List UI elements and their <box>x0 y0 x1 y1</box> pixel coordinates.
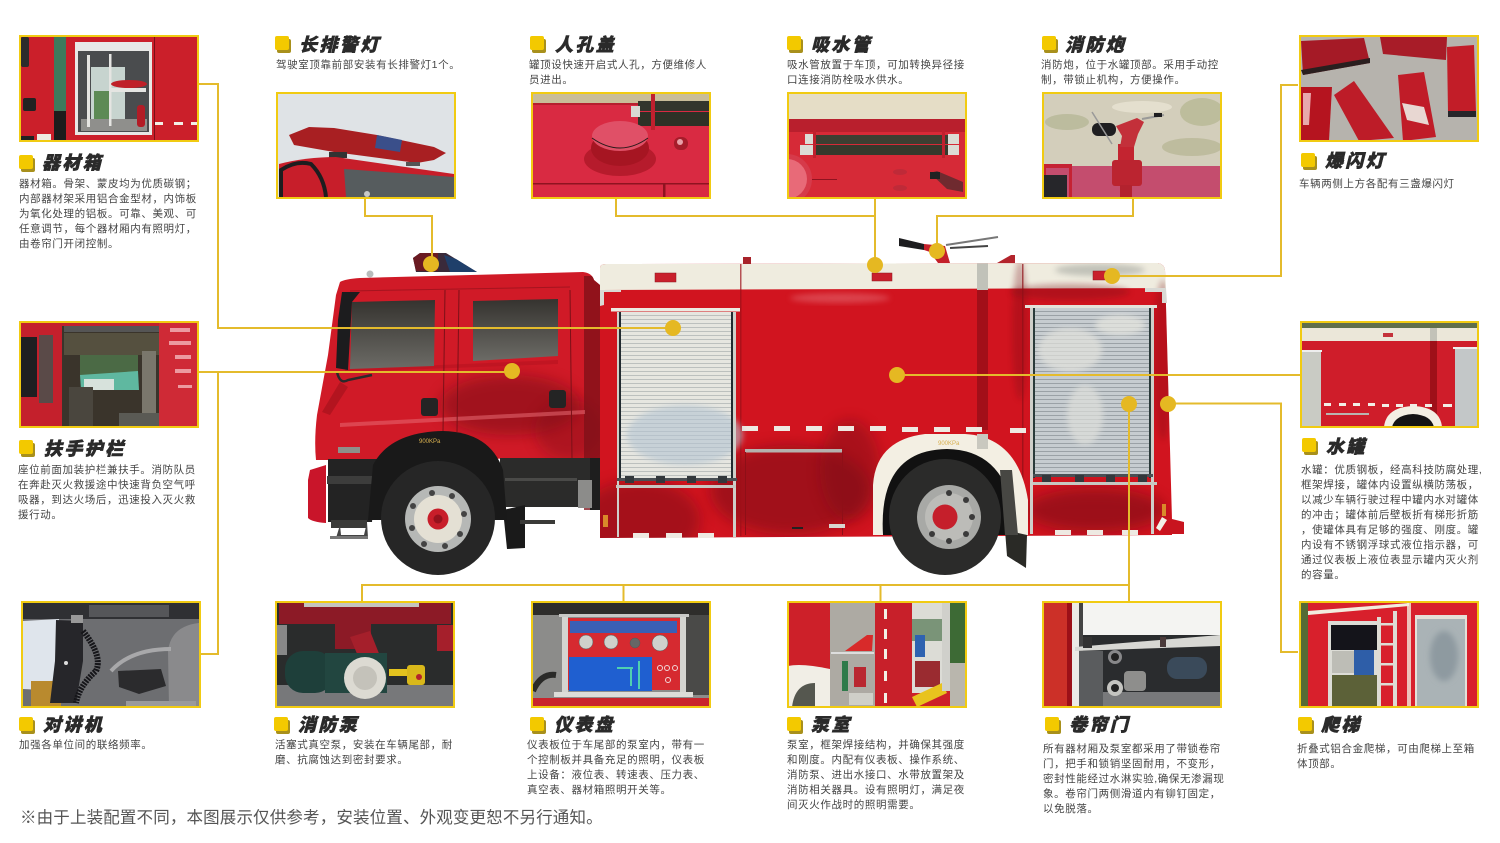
text: pump: 磨、抗腐蚀达到密封要求。 <box>275 754 408 766</box>
text: ladder <box>1297 743 1475 770</box>
icon: bullet water cannon <box>1042 36 1056 50</box>
text: handrail: 座位前面加装护栏兼扶手。消防队员 <box>18 464 196 476</box>
text: intercom: 加强各单位间的联络频率。 <box>19 739 152 751</box>
text: instrument panel: 仪表板位于车尾部的泵室内，带有一 <box>527 739 705 751</box>
photo: instrument panel <box>531 601 711 708</box>
text: water tank: 内设有不锈钢浮球式液位指示器，可 <box>1301 539 1479 551</box>
icon: bullet light bar <box>275 36 289 50</box>
text: water cannon <box>1041 59 1219 86</box>
icon: bullet equipment box <box>19 155 33 169</box>
photo: pump room <box>787 601 967 708</box>
text: strobe: 车辆两侧上方各配有三盏爆闪灯 <box>1299 178 1455 190</box>
text: water tank: 的容量。 <box>1301 569 1345 581</box>
text: handrail: 援行动。 <box>18 509 62 521</box>
tyre pressure labels: 900KPa <box>419 439 441 445</box>
photo: ladder <box>1299 601 1479 708</box>
text: light bar: 驾驶室顶靠前部安装有长排警灯1个。 <box>276 59 460 71</box>
photo: roller door <box>1042 601 1222 708</box>
icon: bullet strobe <box>1301 153 1315 167</box>
text: roller door <box>1043 743 1224 815</box>
text: roller door: 密封性能经过水淋实验,确保无渗漏现 <box>1043 773 1224 785</box>
text: instrument panel: 个控制板并具备充足的照明，仪表板 <box>527 754 705 766</box>
icon: bullet intercom <box>19 717 33 731</box>
text: handrail <box>18 464 196 521</box>
icon: bullet pump <box>274 717 288 731</box>
text: pump room: 间灭火作战时的照明需要。 <box>787 799 920 811</box>
text: ladder: 折叠式铝合金爬梯，可由爬梯上至箱 <box>1297 743 1475 755</box>
photo: equipment box <box>19 35 199 142</box>
photo: light bar <box>276 92 456 199</box>
connector: handrail <box>199 371 512 373</box>
cab <box>315 272 605 516</box>
text: pump room: 消防相关器具。设有照明灯，满足夜 <box>787 784 965 796</box>
cab roof light bar <box>366 253 477 278</box>
footer note: ※由于上装配置不同，本图展示仅供参考，安装位置、外观变更恕不另行通知。 <box>20 809 603 827</box>
front wheel <box>381 461 495 575</box>
connector: strobe <box>1112 85 1298 276</box>
text: water tank: 的冲击；罐体前后壁板折有梯形折筋 <box>1301 509 1479 521</box>
connector: bottom bus <box>362 404 1129 601</box>
text: pump room <box>787 739 965 811</box>
heading: pump room: 泵室 <box>811 715 852 735</box>
connector: light bar <box>365 199 432 264</box>
icon: bullet water tank <box>1302 438 1316 452</box>
heading: manhole: 人孔盖 <box>555 35 616 55</box>
heading: roller door: 卷帘门 <box>1069 715 1130 735</box>
text: suction hose: 口连接消防栓吸水供水。 <box>787 74 909 86</box>
strobe lights on body <box>655 271 1113 282</box>
text: equipment box: 由卷帘门开闭控制。 <box>19 238 119 250</box>
photo: manhole <box>531 92 711 199</box>
icon: bullet handrail <box>19 440 33 454</box>
photo: suction hose <box>787 92 967 199</box>
icon: bullet pump room <box>787 717 801 731</box>
photo: handrail <box>19 321 199 428</box>
text: pump room: 和刚度。内配有仪表板、操作系统、 <box>787 754 965 766</box>
heading: pump: 消防泵 <box>298 715 359 735</box>
cab windows <box>350 299 558 369</box>
text: ladder: 体顶部。 <box>1297 758 1341 770</box>
heading: suction hose: 吸水管 <box>811 35 872 55</box>
text: pump <box>275 739 453 766</box>
text: suction hose: 吸水管放置于车顶，可加转换异径接 <box>787 59 965 71</box>
icon: bullet ladder <box>1298 717 1312 731</box>
chassis side <box>500 458 600 549</box>
rear fender <box>873 434 1028 568</box>
rear roller shutter <box>1025 305 1184 534</box>
rear wheel <box>889 459 1001 575</box>
text: instrument panel: 上设备：液位表、转速表、压力表、 <box>527 769 705 781</box>
text: manhole: 员进出。 <box>529 74 573 86</box>
heading: equipment box: 器材箱 <box>42 153 103 173</box>
text: water tank: 以减少车辆行驶过程中罐内水对罐体 <box>1301 494 1479 506</box>
connector: ladder <box>1168 404 1298 652</box>
door handles <box>421 390 566 416</box>
fire truck illustration <box>308 236 1184 575</box>
connector: intercom <box>201 372 218 654</box>
heading: instrument panel: 仪表盘 <box>554 715 615 735</box>
photo: water tank <box>1300 321 1479 428</box>
text: water tank <box>1301 464 1482 581</box>
front wheel arch <box>368 431 507 520</box>
front roller shutter <box>603 308 743 537</box>
roof water cannon <box>743 237 1015 264</box>
heading: water tank: 水罐 <box>1326 437 1367 457</box>
text: pump room: 泵室，框架焊接结构，并确保其强度 <box>787 739 965 751</box>
icon: bullet manhole <box>530 36 544 50</box>
heading: ladder: 爬梯 <box>1321 715 1362 735</box>
connector: suction hose <box>874 199 876 265</box>
text: water tank: 通过仪表板上液位表显示罐内灭火剂 <box>1301 554 1479 566</box>
connector: equipment box <box>199 84 673 328</box>
text: roller door: 所有器材厢及泵室都采用了带锁卷帘 <box>1043 743 1221 755</box>
text: equipment box: 为氧化处理的铝板。可靠、美观、可 <box>19 208 197 220</box>
text: suction hose <box>787 59 965 86</box>
text: equipment box: 内部器材架采用铝合金型材，内饰板 <box>19 193 197 205</box>
connector: water cannon <box>937 199 1133 251</box>
photo: pump <box>275 601 455 708</box>
text: equipment box <box>19 178 197 250</box>
text: roller door: 门，把手和锁销坚固耐用，不变形， <box>1043 758 1221 770</box>
text: instrument panel: 真空表、器材箱照明开关等。 <box>527 784 672 796</box>
heading: light bar: 长排警灯 <box>299 35 381 55</box>
connector: pump room drops <box>624 585 1129 601</box>
heading: intercom: 对讲机 <box>43 715 104 735</box>
icon: bullet suction hose <box>787 36 801 50</box>
text: pump room: 消防泵、进出水接口、水带放置架及 <box>787 769 965 781</box>
callout dots <box>423 243 1176 412</box>
text: roller door: 以免脱落。 <box>1043 803 1099 815</box>
text: water tank: 水罐：优质钢板，经高科技防腐处理, <box>1301 464 1482 476</box>
photo: strobe lights <box>1299 35 1479 142</box>
heading: water cannon: 消防炮 <box>1065 35 1126 55</box>
box body <box>600 263 1172 538</box>
heading: handrail: 扶手护栏 <box>44 439 126 459</box>
text: equipment box: 任意调节，每个器材厢内有照明灯， <box>19 223 197 235</box>
text: equipment box: 器材箱。骨架、蒙皮均为优质碳钢； <box>19 178 197 190</box>
front bumper and steps <box>308 459 378 539</box>
tyre pressure labels <box>419 439 960 447</box>
photo: water cannon <box>1042 92 1222 199</box>
tyre pressure labels: 900KPa <box>938 441 960 447</box>
body markers <box>633 426 1138 538</box>
side mirror <box>322 292 372 415</box>
connector: manhole cover <box>616 199 875 216</box>
lower compartment <box>745 449 845 535</box>
text: water tank: 框架焊接，罐体内设置纵横防荡板， <box>1301 479 1479 491</box>
text: pump: 活塞式真空泵，安装在车辆尾部，耐 <box>275 739 453 751</box>
text: manhole: 罐顶设快速开启式人孔，方便维修人 <box>529 59 707 71</box>
connector: water tank <box>897 374 1300 376</box>
icon: bullet roller door <box>1045 717 1059 731</box>
icon: bullet instrument panel <box>530 717 544 731</box>
photo: intercom <box>21 601 201 708</box>
text: water cannon: 制，带锁止机构，方便操作。 <box>1041 74 1186 86</box>
text: manhole <box>529 59 707 86</box>
text: roller door: 象。卷帘门两侧滑道内有铆钉固定， <box>1043 788 1221 800</box>
text: water cannon: 消防炮，位于水罐顶部。采用手动控 <box>1041 59 1219 71</box>
text: instrument panel <box>527 739 705 796</box>
text: handrail: 吸器，到达火场后，迅速投入灭火救 <box>18 494 196 506</box>
text: handrail: 在奔赴灭火救援途中快速背负空气呼 <box>18 479 196 491</box>
text: water tank: ，使罐体具有足够的强度、刚度。罐 <box>1301 524 1479 536</box>
heading: strobe: 爆闪灯 <box>1325 151 1386 171</box>
